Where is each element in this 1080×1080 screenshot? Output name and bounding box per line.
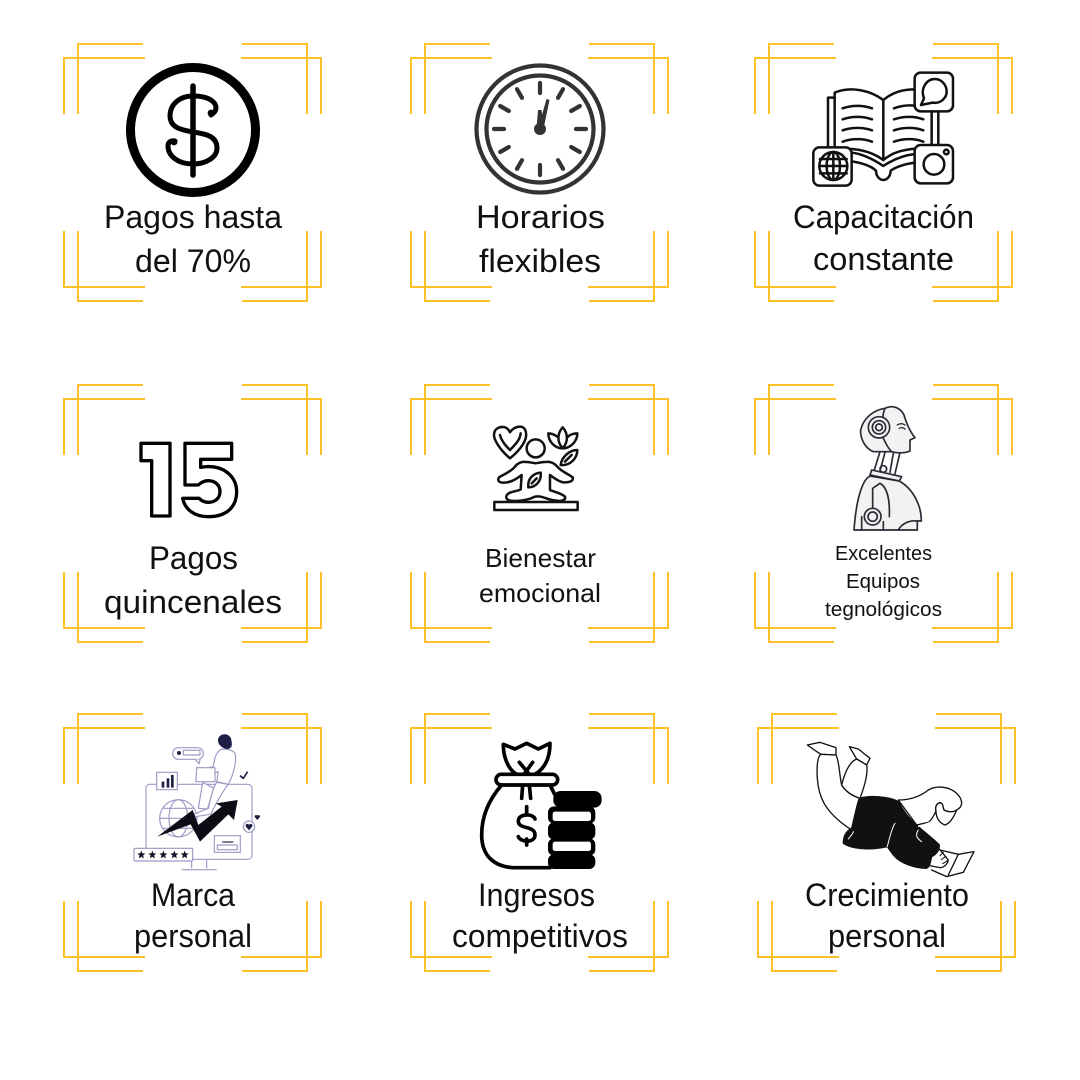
- label: del 70%: [135, 243, 251, 279]
- panel: pagos quincenales: [64, 385, 321, 642]
- frame: [758, 714, 1015, 971]
- icon: personal brand illustration: [134, 734, 260, 870]
- label: flexibles: [479, 243, 601, 279]
- label: [825, 543, 942, 621]
- frame: [411, 44, 668, 301]
- frame: [64, 44, 321, 301]
- icon: person reading on laptop: [807, 742, 974, 877]
- frame: [411, 385, 668, 642]
- icon: number 15 outline: [141, 443, 237, 517]
- label: Crecimiento: [805, 877, 969, 913]
- frame: [755, 385, 1012, 642]
- label: Bienestar: [485, 543, 596, 573]
- label: [476, 199, 605, 279]
- label: emocional: [479, 578, 601, 608]
- frame: [64, 385, 321, 642]
- panel: crecimiento personal: [758, 714, 1015, 971]
- panel: capacitacion constante: [755, 44, 1012, 301]
- label: personal: [134, 918, 252, 954]
- icon: open book with social icons: [813, 73, 953, 186]
- panel: horarios flexibles: [411, 44, 668, 301]
- label: Marca: [151, 877, 235, 913]
- label: [793, 199, 974, 277]
- label: Capacitación: [793, 199, 974, 235]
- icon: dollar coin: [130, 68, 256, 192]
- label: competitivos: [452, 918, 628, 954]
- label: [479, 543, 601, 608]
- panel: excelentes equipos tecnologicos: [755, 385, 1012, 642]
- label: personal: [828, 918, 946, 954]
- label: Excelentes: [835, 543, 932, 565]
- panel: marca personal: [64, 714, 321, 971]
- label: Pagos: [149, 540, 238, 576]
- label: [104, 199, 282, 279]
- frame: [64, 714, 321, 971]
- icon: meditation: [494, 427, 578, 510]
- label: Equipos: [846, 571, 920, 593]
- frame: [411, 714, 668, 971]
- label: [104, 540, 282, 620]
- panel: ingresos competitivos: [411, 714, 668, 971]
- frame: [755, 44, 1012, 301]
- label: constante: [813, 241, 954, 277]
- label: quincenales: [104, 584, 282, 620]
- label: tegnológicos: [825, 599, 942, 621]
- label: Pagos hasta: [104, 199, 282, 235]
- label: [452, 877, 628, 954]
- label: Horarios: [476, 199, 605, 235]
- panel: bienestar emocional: [411, 385, 668, 642]
- label: [134, 877, 252, 954]
- panel: pagos hasta del 70%: [64, 44, 321, 301]
- label: Ingresos: [478, 877, 595, 913]
- icon: money bag and coins: [482, 743, 602, 869]
- icon: robot: [854, 407, 921, 530]
- icon: clock: [476, 66, 604, 192]
- label: [805, 877, 969, 954]
